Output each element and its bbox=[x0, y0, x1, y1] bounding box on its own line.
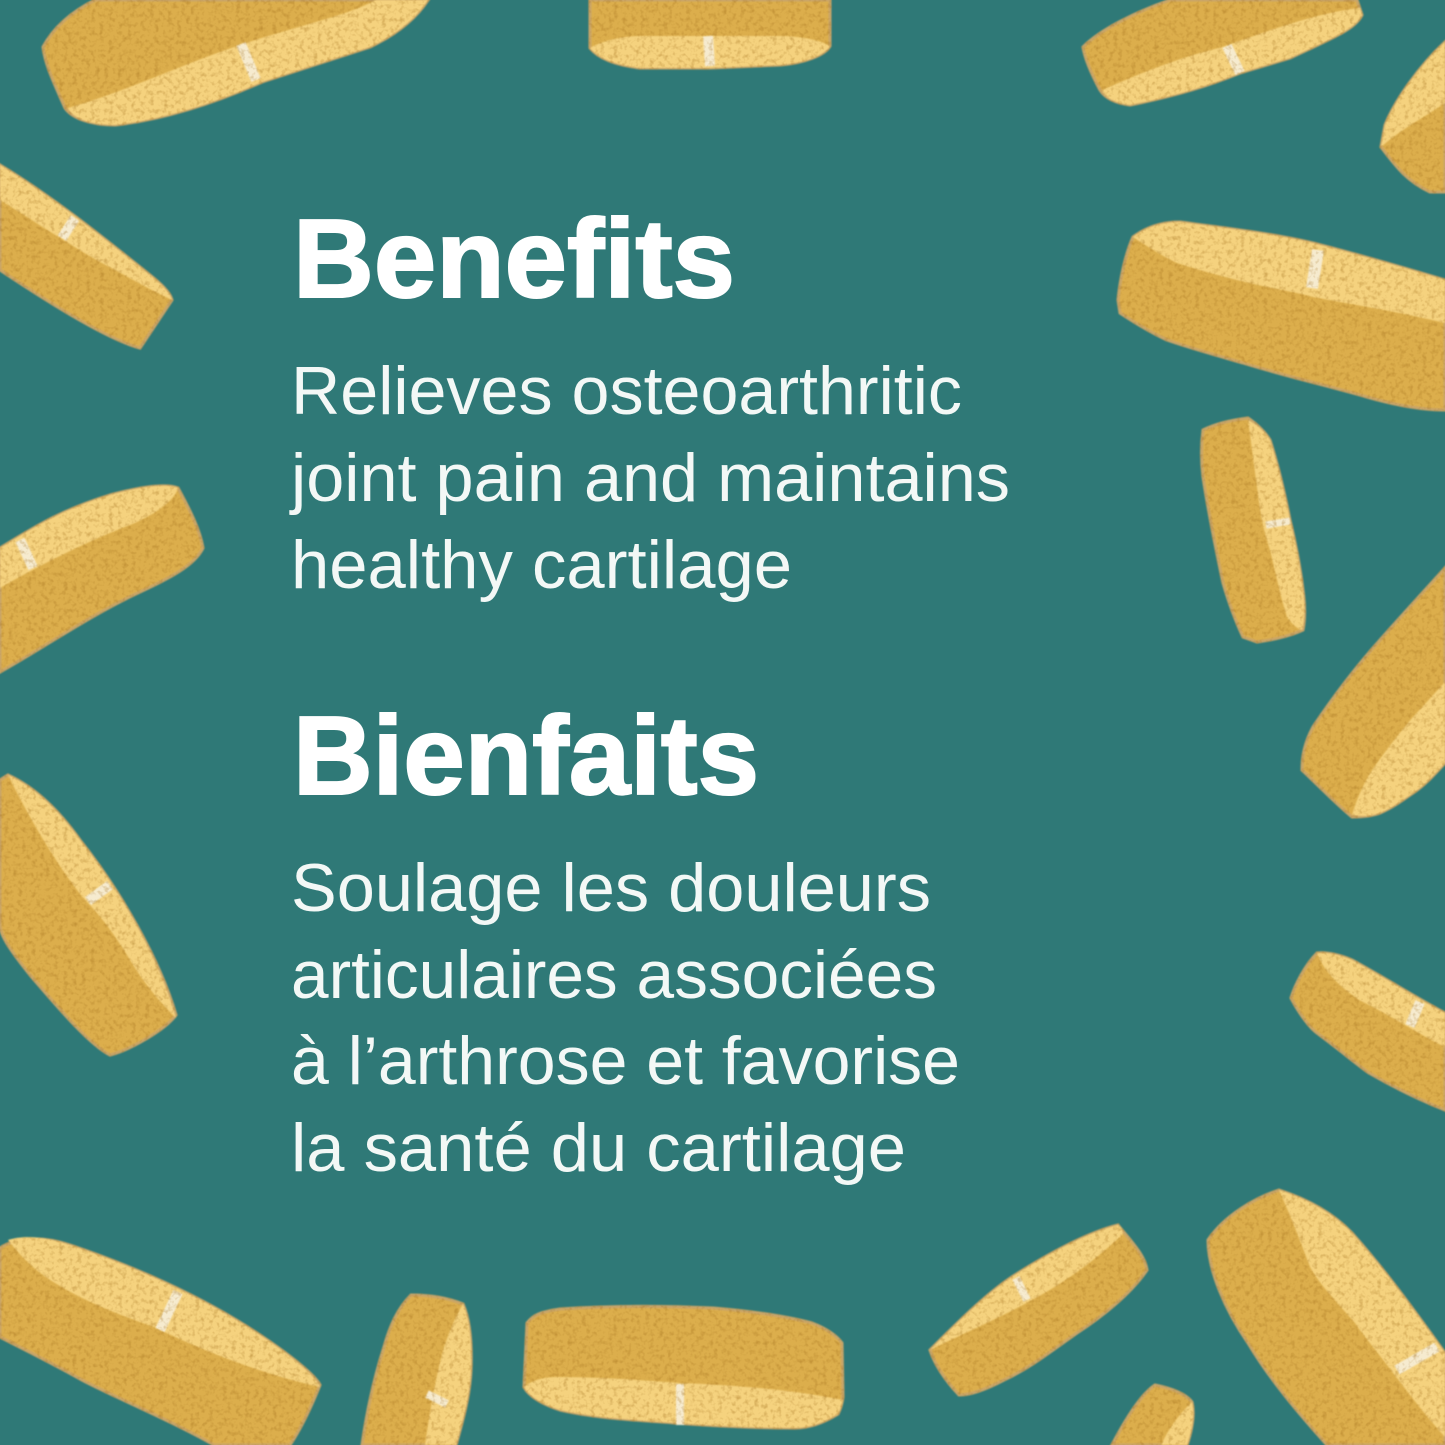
text block: French benefits: articulaires associées bbox=[291, 937, 937, 1013]
tablet: right lower bbox=[1291, 953, 1445, 1110]
tablet: top centre bbox=[590, 0, 830, 68]
text block: English benefits bbox=[289, 353, 1010, 603]
text block: English benefits: joint pain and maintains bbox=[289, 440, 1010, 516]
tablet: right edge bbox=[1302, 568, 1445, 817]
heading: Bienfaits: Bienfaits bbox=[293, 694, 759, 818]
tablet: bottom centre bbox=[524, 1306, 843, 1428]
tablet: bottom right large bbox=[1208, 1190, 1445, 1445]
tablet: bottom right small bbox=[930, 1225, 1147, 1395]
tablet: left upper bbox=[0, 165, 172, 348]
tablet: top left bbox=[43, 0, 428, 125]
text block: English benefits: Relieves osteoarthritic bbox=[291, 353, 962, 429]
tablet: bottom narrow bbox=[362, 1295, 471, 1445]
text block: French benefits: Soulage les douleurs bbox=[291, 850, 931, 926]
text block: French benefits: la santé du cartilage bbox=[291, 1110, 906, 1186]
tablet: right large bbox=[1118, 222, 1445, 410]
text block: French benefits: à l’arthrose et favorise bbox=[291, 1023, 960, 1099]
text block: English benefits: healthy cartilage bbox=[291, 527, 792, 603]
tablet: bottom left bbox=[0, 1237, 320, 1445]
heading: Benefits: Benefits bbox=[293, 197, 735, 321]
tablet: top right bbox=[1083, 0, 1362, 105]
tablet: left middle bbox=[0, 486, 203, 672]
tablet: bottom edge small bbox=[1112, 1385, 1193, 1445]
text block: French benefits bbox=[291, 850, 960, 1186]
tablet: left lower bbox=[0, 775, 176, 1055]
tablet: right oval bbox=[1202, 418, 1304, 642]
tablet: top right corner bbox=[1381, 42, 1445, 192]
